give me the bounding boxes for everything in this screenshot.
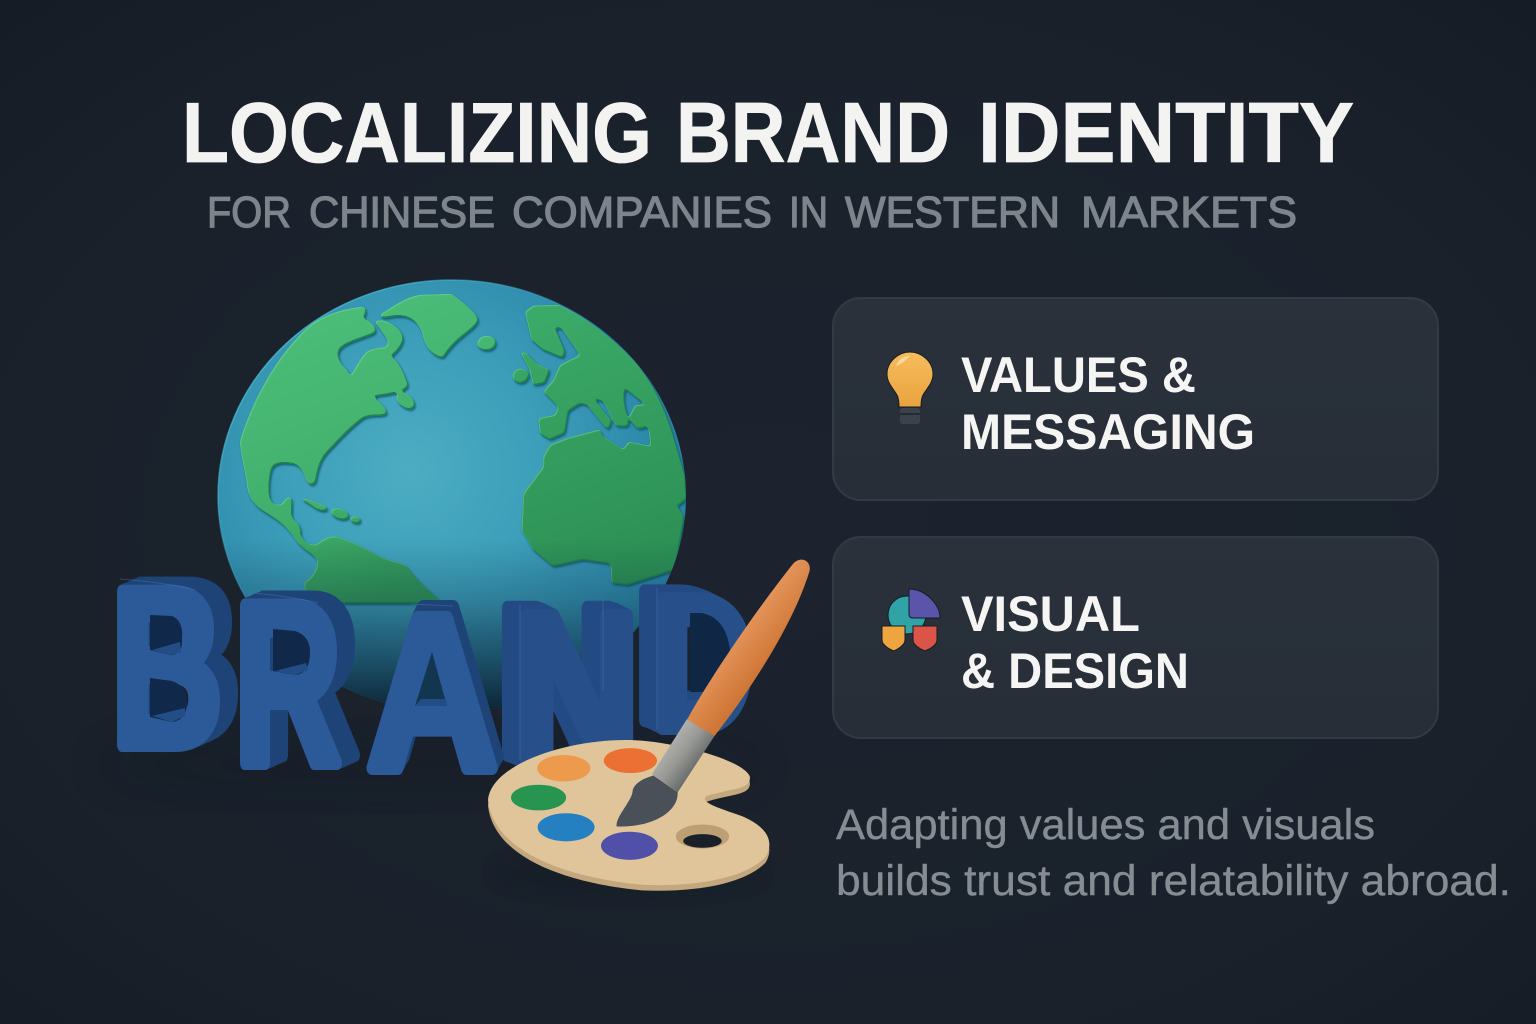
icon: light bulb bbox=[887, 352, 933, 424]
subtitle: MARKETS bbox=[1081, 189, 1297, 237]
letter N: N bbox=[514, 571, 639, 809]
title bbox=[182, 86, 1354, 181]
icon: globe bbox=[210, 280, 700, 715]
title: LOCALIZING bbox=[182, 86, 652, 181]
continents bbox=[240, 294, 686, 603]
panel: values and messaging bbox=[833, 298, 1438, 500]
paint dabs bbox=[537, 755, 590, 781]
letter D: D bbox=[653, 559, 753, 768]
panel: visual and design bbox=[833, 537, 1438, 738]
palette shadow bbox=[500, 855, 757, 891]
letter counters bbox=[150, 613, 730, 722]
icon: shapes bbox=[882, 589, 940, 651]
subtitle: WESTERN bbox=[845, 189, 1060, 237]
subtitle: FOR bbox=[207, 189, 291, 237]
heading: VALUES & bbox=[961, 347, 1196, 403]
heading: MESSAGING bbox=[961, 404, 1255, 460]
ground shadow bbox=[100, 743, 760, 787]
caption: builds trust and relatability abroad. bbox=[836, 857, 1511, 905]
subtitle: IN bbox=[789, 189, 828, 237]
heading: VISUAL bbox=[961, 586, 1140, 642]
BRAND letters bbox=[112, 543, 753, 815]
subtitle: CHINESE bbox=[309, 189, 495, 237]
illustration: globe, BRAND letters, palette and brush bbox=[100, 280, 810, 891]
palette thumb hole bbox=[676, 824, 729, 849]
letter B: B bbox=[112, 543, 222, 793]
icon: paint palette bbox=[488, 740, 769, 891]
subtitle bbox=[207, 189, 1297, 237]
caption: Adapting values and visuals bbox=[836, 801, 1375, 849]
title: BRAND bbox=[676, 86, 950, 181]
letter A: A bbox=[368, 572, 497, 815]
letter R: R bbox=[235, 556, 341, 812]
caption bbox=[836, 801, 1511, 905]
subtitle: COMPANIES bbox=[512, 189, 772, 237]
icon: paint brush bbox=[617, 560, 810, 827]
title: IDENTITY bbox=[978, 86, 1354, 181]
heading bbox=[961, 347, 1255, 460]
heading bbox=[961, 586, 1189, 699]
heading: & DESIGN bbox=[961, 643, 1189, 699]
